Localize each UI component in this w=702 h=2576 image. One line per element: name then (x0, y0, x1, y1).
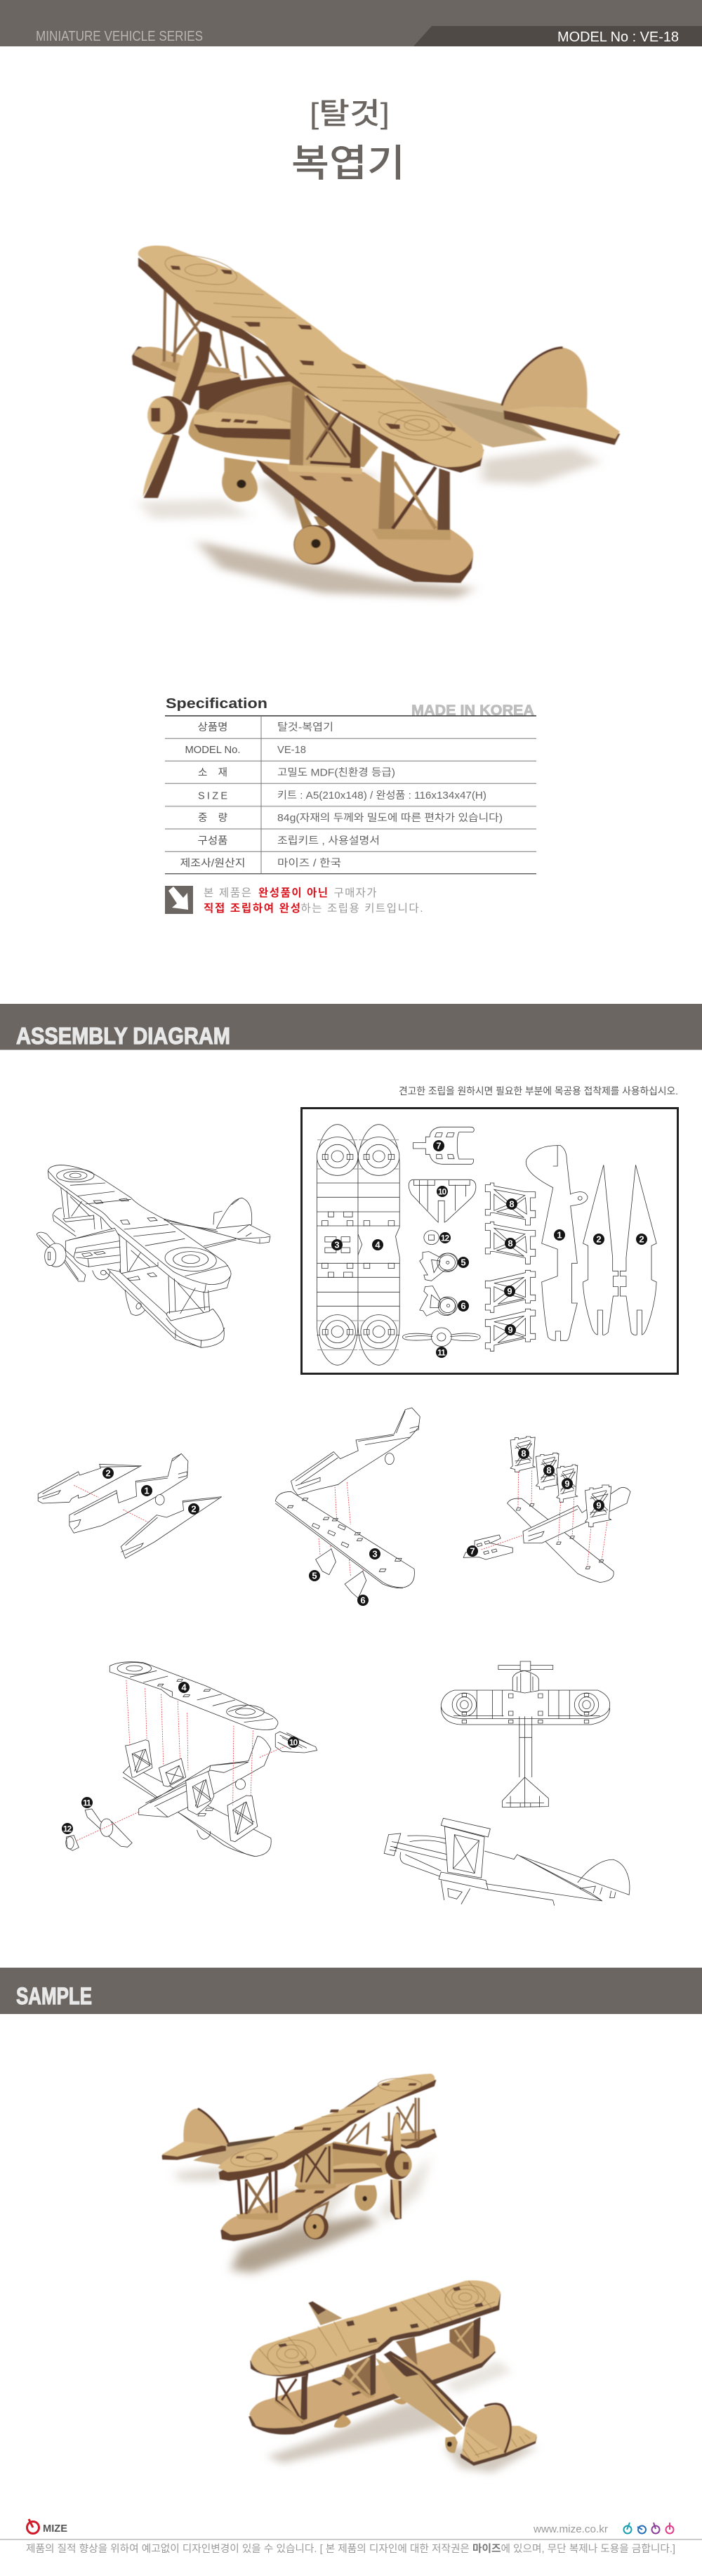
assembly step 4: upper wing and propeller: 10 (289, 1738, 298, 1748)
assembly step 2: lower wing: 5 (312, 1571, 317, 1581)
footer (0, 2519, 702, 2555)
title: [탈것] (310, 97, 390, 130)
parts 5 and 6 (420, 1252, 458, 1316)
row: contents: 조립키트 , 사용설명서 (277, 835, 380, 847)
assembly step 3: struts: 8 (521, 1449, 526, 1458)
website: www.mize.co.kr (533, 2523, 608, 2535)
section band: sample (0, 1968, 702, 2014)
series label: MINIATURE VEHICLE SERIES (36, 29, 203, 44)
part number badges: 9 (508, 1325, 513, 1335)
model number: MODEL No : VE-18 (557, 30, 679, 45)
assembly step 2: lower wing: 3 (372, 1548, 378, 1560)
notice text: 하는 조립용 키트입니다. (300, 902, 423, 915)
logo (27, 2519, 67, 2535)
assembly step 4: upper wing and propeller (62, 1662, 317, 1857)
part 11 (403, 1328, 480, 1347)
row: weight: 중 량 (198, 812, 227, 824)
icons: brand marks (623, 2523, 674, 2533)
photo: sample biplane, front view (161, 2074, 437, 2273)
part 12 (424, 1231, 439, 1245)
row: maker: 마이즈 / 한국 (277, 857, 341, 870)
parts 8 (485, 1183, 536, 1264)
row: material: 소 재 (198, 767, 227, 778)
part number badges: 11 (437, 1347, 446, 1357)
assembly caption: 견고한 조립을 원하시면 필요한 부분에 목공용 접착제를 사용하십시오. (399, 1085, 678, 1097)
section band: assembly diagram (0, 1004, 702, 1050)
title (291, 97, 405, 185)
row: maker (180, 857, 341, 870)
row: size: 키트 : A5(210x148) / 완성품 : 116x134x47(H) (277, 790, 486, 802)
made in korea mark: MADE IN KOREA (411, 702, 534, 719)
row: product name: 상품명 (198, 721, 227, 733)
assembly step 3: struts: 7 (470, 1545, 475, 1557)
assembly step 4: upper wing and propeller: 12 (63, 1824, 72, 1833)
assembly step 1: fuselage (38, 1453, 222, 1558)
row: material: 고밀도 MDF(친환경 등급) (277, 767, 395, 778)
part number badges: 3 (334, 1239, 340, 1250)
row: contents (198, 835, 380, 847)
specification table (165, 696, 536, 874)
product name: 복엽기 (291, 143, 405, 185)
parts 2 (583, 1165, 618, 1335)
assembly step 4: upper wing and propeller: 11 (83, 1798, 91, 1808)
part number badges: 8 (508, 1238, 513, 1249)
row: maker: 제조사/원산지 (180, 857, 246, 870)
part 7 (413, 1127, 474, 1164)
assembly step 3: struts: 9 (564, 1478, 570, 1489)
row: material (198, 767, 395, 778)
assembly step 4: upper wing and propeller: 4 (181, 1682, 187, 1693)
part number badges: 8 (509, 1198, 515, 1210)
wing parts 3 and 4 (317, 1125, 399, 1365)
notice text: 구매자가 (334, 887, 376, 899)
part number badges: 7 (436, 1141, 442, 1151)
section band: sample: SAMPLE (16, 1983, 92, 2010)
notice text: 본 제품은 (204, 887, 251, 899)
line drawing: side view (384, 1818, 630, 1906)
notice text: 직접 조립하여 완성 (204, 902, 300, 915)
row: weight: 84g(자재의 두께와 밀도에 따른 편차가 있습니다) (277, 812, 503, 824)
parts sheet (302, 1109, 678, 1374)
part number badges: 1 (557, 1229, 562, 1241)
photo: sample biplane, rear view (249, 2280, 538, 2473)
assembly step 1: fuselage: 2 (105, 1468, 111, 1478)
section band: assembly diagram: ASSEMBLY DIAGRAM (16, 1023, 230, 1049)
row: weight (198, 812, 503, 824)
logo: MIZE (43, 2523, 67, 2535)
part number badges: 2 (639, 1234, 644, 1245)
assembly step 2: lower wing (275, 1408, 420, 1606)
row: model: MODEL No. (185, 745, 240, 756)
row: size: SIZE (198, 791, 227, 802)
spec heading: Specification (166, 696, 267, 712)
part number badges (331, 1140, 647, 1358)
assembly step 1: fuselage: 1 (144, 1485, 150, 1496)
photo: main biplane (132, 246, 620, 598)
notice text: 완성품이 아닌 (258, 887, 328, 899)
assembly step 2: lower wing: 6 (360, 1595, 366, 1606)
row: contents: 구성품 (198, 835, 227, 847)
assembly step 3: struts (463, 1437, 630, 1583)
part number badges: 12 (441, 1234, 449, 1243)
part 10 (409, 1179, 476, 1222)
icon: notice arrow (165, 886, 193, 914)
row: product name (198, 721, 333, 733)
parts 9 (485, 1270, 536, 1351)
assembly step 3: struts: 8 (546, 1465, 552, 1475)
part number badges: 10 (438, 1187, 446, 1197)
line drawing: top view (441, 1661, 610, 1807)
part number badges: 5 (461, 1257, 466, 1267)
notice text (204, 887, 423, 915)
part number badges: 4 (375, 1239, 380, 1250)
row: model (185, 745, 306, 756)
part number badges: 6 (461, 1301, 466, 1311)
row: product name: 탈것-복엽기 (277, 721, 333, 733)
assembly step 3: struts: 9 (596, 1501, 602, 1510)
header band (0, 0, 702, 46)
row: model: VE-18 (277, 745, 306, 756)
line drawing: assembled biplane (37, 1165, 270, 1347)
footer notice: 제품의 질적 향상을 위하여 예고없이 디자인변경이 있을 수 있습니다. [ 본 제품의 디자인에 대한 저작권은 마이즈에 있으며, 무단 복제나 도용을 금합니다.] (26, 2543, 675, 2555)
assembly step 1: fuselage: 2 (191, 1503, 197, 1515)
part number badges: 9 (507, 1286, 512, 1297)
row: size (198, 790, 486, 802)
part 1 (526, 1146, 588, 1340)
part number badges: 2 (596, 1234, 602, 1245)
